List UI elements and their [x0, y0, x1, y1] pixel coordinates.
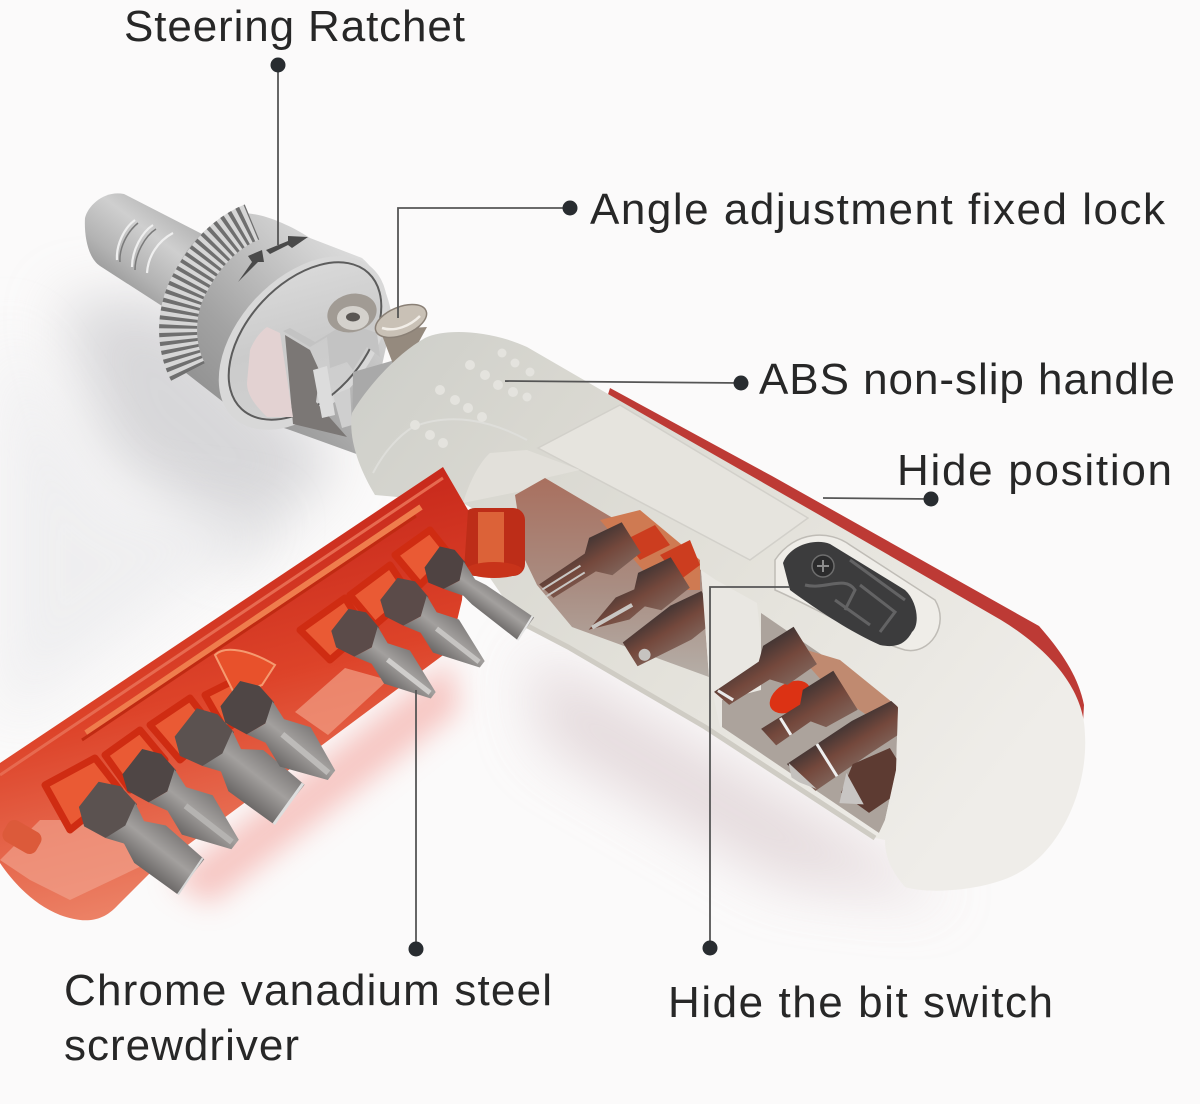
red hinge cylinder [463, 508, 525, 578]
callout: hide the bit switch [668, 587, 1053, 1027]
bit: phillips 6 [374, 572, 497, 682]
callout: hide position [823, 446, 1172, 506]
callout: abs non-slip handle: ABS non-slip handle [759, 355, 1175, 404]
clear ring detail [215, 650, 275, 695]
bit holders [45, 530, 450, 830]
bit: torx [532, 519, 643, 611]
callout: abs non-slip handle [505, 355, 1175, 404]
bit: phillips 5 [325, 603, 448, 713]
tray outer rim [0, 478, 443, 775]
knurled ring [178, 222, 252, 372]
red bit tray [0, 467, 468, 920]
bit: torx [714, 626, 817, 705]
red glow [770, 680, 809, 714]
slot [285, 335, 347, 437]
orange bit holders [600, 510, 700, 590]
bit: phillips 2 [116, 743, 251, 864]
red spine of handle [600, 388, 1084, 740]
ratchet face [186, 224, 420, 462]
bottom edge strip [520, 622, 875, 838]
callout: chrome vanadium steel screwdriver: screwdriver [64, 1021, 299, 1070]
bit: phillips [577, 554, 692, 648]
head rib line [373, 419, 527, 473]
callout: hide the bit switch: Hide the bit switch [668, 978, 1053, 1027]
hex screw [323, 288, 381, 338]
polished d face [247, 327, 293, 417]
fixed lock [371, 298, 431, 364]
callout: chrome vanadium steel screwdriver [64, 690, 552, 1070]
bit: pozi [620, 588, 720, 671]
bit: phillips 4 [214, 675, 348, 795]
tray lower highlights [295, 668, 388, 735]
strut between compartments [701, 570, 761, 735]
direction arrows [238, 236, 308, 282]
bit: flat 1 [72, 774, 209, 898]
arch panel [463, 450, 580, 503]
handle body [351, 332, 1085, 891]
callout: angle adjustment fixed lock [398, 185, 1166, 318]
knurled neck [352, 360, 400, 460]
bit: small hex [761, 670, 858, 746]
spring clip [283, 322, 380, 370]
callout: steering ratchet [124, 2, 465, 245]
bit: flat 3 [167, 702, 306, 827]
ratchet head [85, 193, 431, 462]
round tray notch [0, 817, 44, 857]
right bit compartment [714, 613, 898, 833]
label recess [538, 405, 808, 560]
soft shadows [0, 300, 950, 905]
ratchet body [163, 213, 392, 456]
left bit compartment [515, 478, 720, 677]
grip dots [410, 348, 534, 448]
callout: chrome vanadium steel screwdriver: Chrome vanadium steel [64, 966, 552, 1015]
callout: angle adjustment fixed lock: Angle adjustment fixed lock [590, 185, 1166, 234]
bit: large hex [787, 701, 898, 791]
bit: flat 7 [419, 542, 539, 645]
tray highlight rail [86, 507, 421, 733]
callout: hide position: Hide position [897, 446, 1172, 495]
bit switch [775, 535, 940, 651]
callout: steering ratchet: Steering Ratchet [124, 2, 465, 51]
bit: flat [840, 748, 896, 813]
socket shaft [85, 193, 204, 306]
